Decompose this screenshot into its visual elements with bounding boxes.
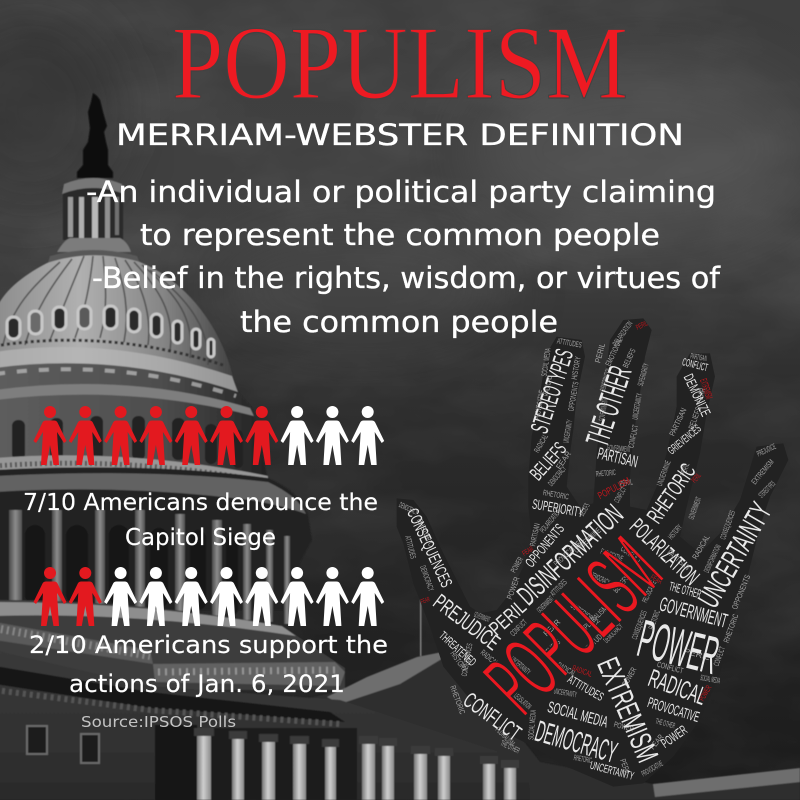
small background words: BELIEFS xyxy=(687,406,703,431)
hand silhouette xyxy=(397,318,788,787)
small background words: RADICAL xyxy=(532,432,550,454)
large word labels: THREATENED xyxy=(436,628,479,669)
small background words: FEAR xyxy=(648,733,666,751)
small background words: SOCIAL MEDIA xyxy=(540,347,553,377)
small background words: CONFLICT xyxy=(626,424,640,449)
small background words: DISINFORMATION xyxy=(598,367,613,392)
small red words: EXTREMISM xyxy=(697,378,714,401)
small background words: RHETORIC xyxy=(542,488,570,502)
small background words: UNCERTAINTY xyxy=(630,392,644,420)
word cloud hand: STEREOTYPES xyxy=(526,346,579,437)
small red words: POWER xyxy=(697,684,713,703)
small background words: ATTITUDES xyxy=(582,627,609,655)
statistic: 2/10 support: 2/10 Americans support the xyxy=(29,631,388,659)
large word labels: SUPERIORITY xyxy=(531,496,585,520)
large word labels: PREJUDICE xyxy=(429,589,505,655)
large word labels: PROVOCATIVE xyxy=(645,695,701,726)
small background words: DEMOCRACY xyxy=(589,570,611,587)
small background words: DISINFORMATION xyxy=(702,543,723,574)
large word labels: GRIEVENCES xyxy=(666,423,704,457)
definition text: -An individual or political party claiming xyxy=(86,175,716,209)
small background words: BELIEFS xyxy=(611,574,631,595)
small background words: PROVOCATIVE xyxy=(640,759,665,778)
small red words: PERIL xyxy=(634,319,649,332)
large word labels: BELIEFS xyxy=(526,439,571,485)
small background words: THE OTHER xyxy=(654,717,676,730)
small background words: UNDERMINE xyxy=(655,459,673,487)
large word labels: GOVERNMENT xyxy=(657,594,730,633)
small background words: GOVERNMENT xyxy=(535,594,556,615)
small background words: ATTITUDES xyxy=(548,578,569,598)
large word labels xyxy=(403,346,779,783)
small background words: PERIL xyxy=(593,342,607,364)
large word labels: UNCERTAINTY xyxy=(589,760,635,783)
definition text: -Belief in the rights, wisdom, or virtues of xyxy=(92,261,721,295)
small background words: PROVOCATIVE xyxy=(640,579,658,604)
small background words: PROVOCATIVE xyxy=(532,389,547,420)
small background words: SUPERIORITY xyxy=(569,601,602,628)
small background words: BELIEFS xyxy=(542,638,562,658)
flagpole xyxy=(420,590,421,656)
small background words: RHETORIC xyxy=(448,684,467,716)
small background words: CONFLICT xyxy=(712,645,727,667)
small background words: CONFLICT xyxy=(656,660,684,676)
small background words: OPPONENTS xyxy=(566,381,581,412)
small background words: GOVERNMENT xyxy=(597,397,610,422)
small background words: POWER xyxy=(613,720,635,734)
subheading: MERRIAM-WEBSTER DEFINITION xyxy=(116,118,684,152)
small background words: RADICAL xyxy=(556,661,578,679)
small background words: SUPERIORITY xyxy=(636,362,651,387)
definition text: the common people xyxy=(240,305,558,339)
small background words: UNDERMINE xyxy=(572,526,603,555)
large word labels: CONFLICT xyxy=(459,687,526,746)
small background words: RADICAL xyxy=(541,375,554,397)
main dome xyxy=(0,255,238,392)
large word labels: THE OTHER xyxy=(668,579,703,601)
statistic: 7/10 denounce: 7/10 Americans denounce the xyxy=(23,490,378,516)
large word labels: THE OTHER xyxy=(578,361,639,450)
small background words: FEAR xyxy=(695,387,708,404)
small background words: PARTISAN xyxy=(690,351,708,363)
small background words: PERIL xyxy=(619,477,634,489)
small background words: PERIL xyxy=(678,461,692,477)
word cloud hand xyxy=(397,318,788,787)
large word labels: ATTITUDES xyxy=(565,672,606,704)
large word labels: DEMOCRACY xyxy=(531,715,621,770)
rotunda colonnade xyxy=(0,467,312,624)
small background words: UNCERTAINTY xyxy=(561,419,574,444)
small background words: POWER xyxy=(621,666,638,688)
small background words: HISTORY xyxy=(666,522,684,541)
small background words: PROVOCATIVE xyxy=(552,539,583,568)
small background words: POLARIZATION xyxy=(538,507,563,535)
small background words: RHETORIC xyxy=(415,517,436,548)
lower building wall xyxy=(0,650,530,800)
small background words: POWER xyxy=(509,555,525,574)
terrace and balustrade xyxy=(0,600,345,690)
small background words: CONFLICT xyxy=(508,618,529,638)
small background words: PARTISAN xyxy=(528,522,542,547)
dome lantern colonnade xyxy=(47,178,141,266)
small background words: RHETORIC xyxy=(722,613,741,644)
small background words: RADICAL xyxy=(479,648,500,668)
small red words xyxy=(420,319,714,703)
small background words xyxy=(397,319,777,778)
small red words: FEAR xyxy=(520,544,535,558)
small red words: FEAR xyxy=(649,572,664,586)
small background words: PERIL xyxy=(618,758,632,777)
small background words: HISTORY xyxy=(448,649,469,674)
small background words: CONSEQUENCES xyxy=(630,609,649,641)
dome windows xyxy=(7,306,214,357)
large word labels: PERIL xyxy=(485,596,531,640)
statistic: 2/10 support xyxy=(29,631,388,698)
definition text: to represent the common people xyxy=(140,218,660,252)
small red words: POPULISM xyxy=(596,476,632,502)
small background words: BELIEFS xyxy=(577,502,592,518)
small background words: ATTITUDES xyxy=(556,336,583,350)
small background words: PLURALISM xyxy=(582,604,609,631)
small background words: PARTISAN xyxy=(668,406,689,438)
small red words: FEAR xyxy=(420,596,431,606)
large word labels: SOCIAL MEDIA xyxy=(546,699,610,732)
small background words: GOVERNMENT xyxy=(606,443,631,454)
word cloud hand: PREJUDICE xyxy=(755,442,777,458)
small background words: UNCERTAINTY xyxy=(509,655,533,677)
small background words: DEMOCRACY xyxy=(602,622,625,645)
small red words: RADICAL xyxy=(571,663,594,679)
statistic: 7/10 denounce: Capitol Siege xyxy=(125,525,276,551)
small background words: PROVOCATIVE xyxy=(599,547,624,563)
definition text xyxy=(86,175,721,339)
small background words: PERIL xyxy=(683,647,712,662)
large word labels: RADICAL xyxy=(645,664,710,711)
small background words: PLURALISM xyxy=(494,725,516,748)
small background words: HISTORY xyxy=(570,355,583,380)
small red words: PERIL xyxy=(690,471,703,485)
small background words: CONFLICT xyxy=(612,485,628,504)
small background words: THE OTHER xyxy=(499,739,521,755)
large word labels: CONFLICT xyxy=(681,356,709,374)
small background words: CONSEQUENCES xyxy=(460,643,474,677)
small background words: ATTITUDES xyxy=(403,535,418,560)
small background words: LEGISLATION xyxy=(512,691,533,711)
large word labels: OPPONENTS xyxy=(522,520,567,570)
small background words: DEMOCRACY xyxy=(546,464,568,488)
small background words: RHETORIC xyxy=(595,468,616,479)
small background words: PARTISAN xyxy=(665,548,692,572)
large word labels: POLARIZATION xyxy=(625,513,705,590)
small background words: EMOTIONAL xyxy=(604,336,625,368)
small background words: UNCERTAINTY xyxy=(553,686,578,699)
small background words: RHETORIC xyxy=(647,609,662,631)
small background words: FEAR xyxy=(542,617,562,638)
small background words: CONSEQUENCES xyxy=(718,509,737,541)
small background words: SOCIAL MEDIA xyxy=(526,709,538,740)
small background words: SOCIAL MEDIA xyxy=(700,673,721,685)
small background words: DEMOCRACY xyxy=(397,500,420,517)
large word labels: DISINFORMATION xyxy=(511,498,630,612)
large word labels: DEMONIZE xyxy=(681,371,714,419)
small background words: POWER xyxy=(505,576,522,601)
large word labels: POWER xyxy=(658,722,690,751)
small background words: POLARIZATION xyxy=(611,319,635,348)
small background words: RHETORIC xyxy=(573,753,593,765)
small background words: BELIEFS xyxy=(621,347,638,369)
small background words: RADICAL xyxy=(691,533,712,561)
pictogram: 2 of 10 people in red xyxy=(34,567,384,626)
pictogram: 7 of 10 people in red xyxy=(34,406,384,465)
title: POPULISM xyxy=(172,4,628,121)
statue of freedom xyxy=(77,93,113,178)
large word labels: RHETORIC xyxy=(641,458,701,528)
right wing pediment xyxy=(300,650,800,800)
small background words: GOVERNMENT xyxy=(687,496,703,521)
small background words: GOVERNMENT xyxy=(473,610,491,624)
statistic: 7/10 denounce xyxy=(23,490,378,551)
small background words: EXTREMISM xyxy=(750,458,776,486)
source note: Source:IPSOS Polls xyxy=(81,713,236,731)
large word labels: CONSEQUENCES xyxy=(403,505,456,590)
small background words: CONFLICT xyxy=(619,544,643,565)
statistic: 2/10 support: actions of Jan. 6, 2021 xyxy=(69,670,345,698)
small background words: OPPONENTS xyxy=(730,573,752,611)
large word labels: PARTISAN xyxy=(596,444,640,471)
drum below dome xyxy=(0,363,268,482)
small background words: DEMOCRACY xyxy=(418,564,436,593)
small background words: FEAR xyxy=(554,449,573,471)
